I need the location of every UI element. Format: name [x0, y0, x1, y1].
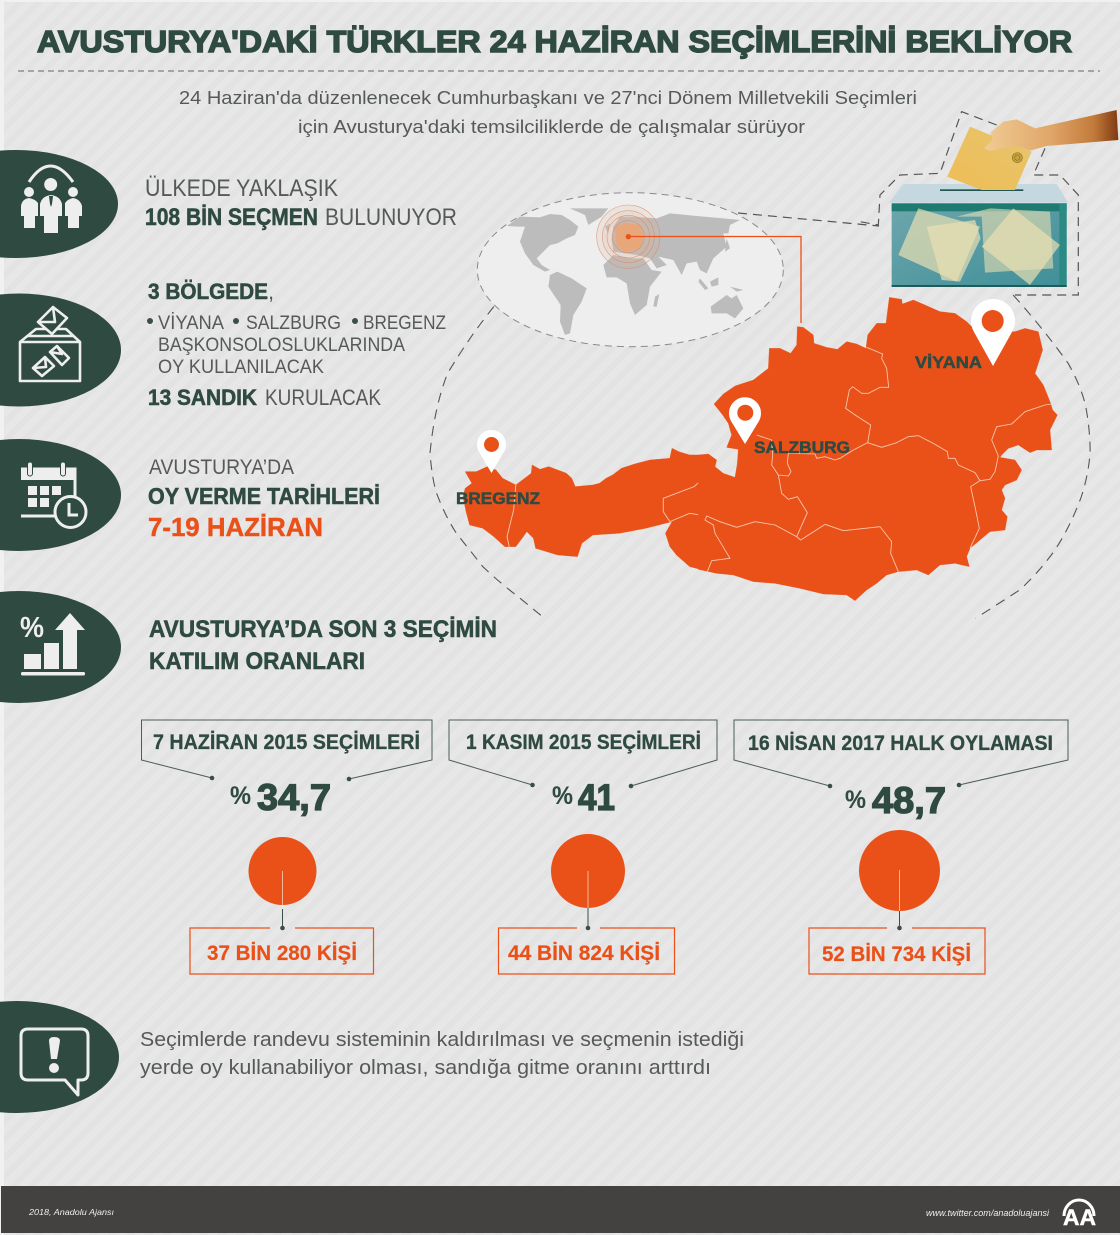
text: voting dates: 7-19 HAZİRAN: [148, 512, 323, 542]
icon: Vienna pin: [971, 299, 1015, 366]
icon: Salzburg pin: [729, 397, 761, 444]
text: regions: BAŞKONSOLOSLUKLARINDA: [158, 335, 405, 356]
text: regions: 3 BÖLGEDE: [148, 279, 268, 304]
icon: ballot box: [0, 294, 121, 406]
callout: 37 bin 280: [190, 928, 374, 974]
icon: rising chart: [0, 591, 121, 703]
icon: exclamation bubble: [0, 1001, 119, 1113]
label: Salzburg: SALZBURG: [754, 438, 850, 457]
number: 34,7: 34,7: [257, 777, 331, 818]
callout: 1 Kasim 2015: [449, 720, 717, 788]
callout: 7 Haziran 2015: 7 HAZİRAN 2015 SEÇİMLERİ: [153, 731, 420, 754]
text: note: [140, 1029, 744, 1079]
number: 48,7: 48,7: [872, 780, 946, 821]
subtitle: 24 Haziran'da düzenlenecek Cumhurbaşkanı ve 27'nci Dönem Milletvekili Seçimleri: [179, 87, 917, 108]
callout: 44 bin 824: 44 BİN 824 KİŞİ: [508, 942, 660, 965]
map: Austria west: [463, 448, 709, 570]
number: 41: %: [552, 782, 573, 810]
callout: 1 Kasim 2015: 1 KASIM 2015 SEÇİMLERİ: [466, 731, 701, 754]
panel: turnout heading: [0, 591, 497, 703]
text: regions: OY KULLANILACAK: [158, 357, 324, 378]
number: 34,7: %: [230, 782, 251, 810]
callout: 52 bin 734: 52 BİN 734 KİŞİ: [822, 943, 971, 966]
label: Viyana: VİYANA: [915, 353, 982, 372]
callout: 16 Nisan 2017: 16 NİSAN 2017 HALK OYLAMASI: [748, 732, 1053, 755]
callout: 7 Haziran 2015: [142, 720, 432, 781]
text: voters: [145, 175, 457, 231]
text: turnout heading: [149, 616, 497, 675]
text: turnout heading: AVUSTURYA’DA SON 3 SEÇİMİN: [149, 616, 497, 643]
callout: 44 bin 824: [498, 928, 674, 974]
text: turnout heading: KATILIM ORANLARI: [149, 648, 365, 675]
text: regions: KURULACAK: [265, 385, 381, 410]
circle: 34,7: [248, 837, 316, 930]
text: regions: VİYANA: [158, 313, 224, 334]
text: regions: 13 SANDIK: [148, 385, 257, 410]
footer credit: 2018, Anadolu Ajansı: [28, 1207, 114, 1217]
text: regions: SALZBURG: [246, 313, 341, 334]
subtitle: [179, 87, 917, 137]
circle: 41: [551, 834, 625, 930]
text: voting dates: OY VERME TARİHLERİ: [148, 483, 380, 509]
icon: voters: [0, 150, 118, 258]
callout: 16 Nisan 2017: [734, 720, 1068, 788]
text: note: yerde oy kullanabiliyor olması, sandığa gitme oranını arttırdı: [140, 1057, 711, 1079]
panel: election 1: [142, 720, 432, 974]
panel: regions: [0, 279, 446, 410]
text: regions: BREGENZ: [363, 313, 446, 334]
text: voting dates: [148, 456, 380, 542]
text: voting dates: AVUSTURYA’DA: [149, 456, 294, 479]
number: 48,7: %: [845, 786, 866, 814]
subtitle: için Avusturya'daki temsilciliklerde de çalışmalar sürüyor: [298, 116, 805, 137]
callout: 52 bin 734: [809, 928, 985, 974]
text: regions: [147, 279, 446, 410]
circle: 48,7: [859, 830, 940, 930]
text: voters: ÜLKEDE YAKLAŞIK: [145, 175, 338, 202]
icon: rising chart: %: [20, 612, 44, 644]
map: Austria east: [698, 297, 1057, 601]
panel: ballot box illustration: [860, 110, 1118, 295]
title: AVUSTURYA'DAKİ TÜRKLER 24 HAZİRAN SEÇİMLERİNİ BEKLİYOR: [37, 24, 1072, 59]
text: note: Seçimlerde randevu sisteminin kaldırılması ve seçmenin istediği: [140, 1029, 744, 1051]
icon: calendar: [0, 439, 121, 551]
number: 41: 41: [578, 777, 615, 818]
text: voters: 108 BİN SEÇMEN: [145, 204, 318, 231]
panel: dashed enclosure: [430, 295, 1090, 618]
panel: voter count: [0, 150, 457, 258]
panel: election 2: [449, 720, 717, 974]
panel: voting dates: [0, 439, 380, 551]
callout: 37 bin 280: 37 BİN 280 KİŞİ: [207, 942, 357, 965]
chart: world continents: [507, 208, 743, 335]
icon: AA logo: AA: [1063, 1205, 1096, 1230]
text: voters: BULUNUYOR: [325, 204, 457, 231]
dashed connector map to ballot: [738, 213, 879, 226]
label: Bregenz: BREGENZ: [456, 489, 540, 508]
text: regions: ,: [268, 279, 274, 304]
footer link: www.twitter.com/anadoluajansi: [926, 1208, 1050, 1218]
panel: world map: [477, 193, 783, 347]
number: 41: [552, 777, 615, 818]
arrow: connector world map to Austria: [628, 236, 801, 323]
panel: note: [0, 1001, 744, 1113]
icon: Bregenz pin: [477, 430, 506, 473]
footer: [1, 1186, 1120, 1233]
panel: election 3: [734, 720, 1068, 974]
icon: location rings: [597, 205, 660, 268]
map: Austria: [463, 297, 1057, 601]
